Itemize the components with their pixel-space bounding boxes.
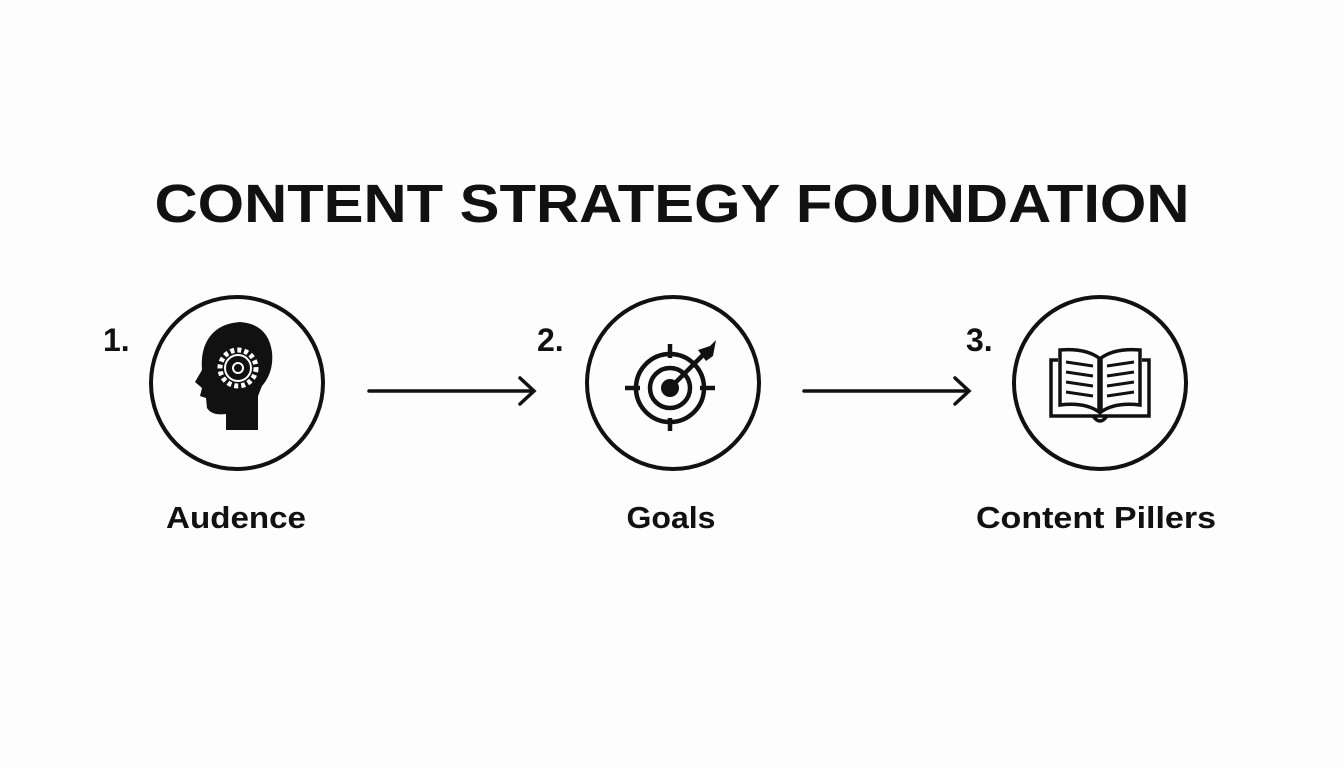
circle 2 with target icon [587,297,759,469]
number 1: 1. [103,322,130,358]
number 3: 3. [966,322,993,358]
label goals: Goals [626,500,716,535]
circle 1 with head icon [151,297,323,469]
arrow 1 [369,378,534,404]
step 3: content pillars [966,297,1216,535]
label audience: Audence [166,500,306,535]
step 2: goals [537,297,759,535]
title: CONTENT STRATEGY FOUNDATION [154,174,1190,234]
arrow 2 [804,378,969,404]
step 1: audience [103,297,323,535]
label content pillers: Content Pillers [976,500,1216,535]
number 2: 2. [537,322,564,358]
circle 3 with book icon [1014,297,1186,469]
